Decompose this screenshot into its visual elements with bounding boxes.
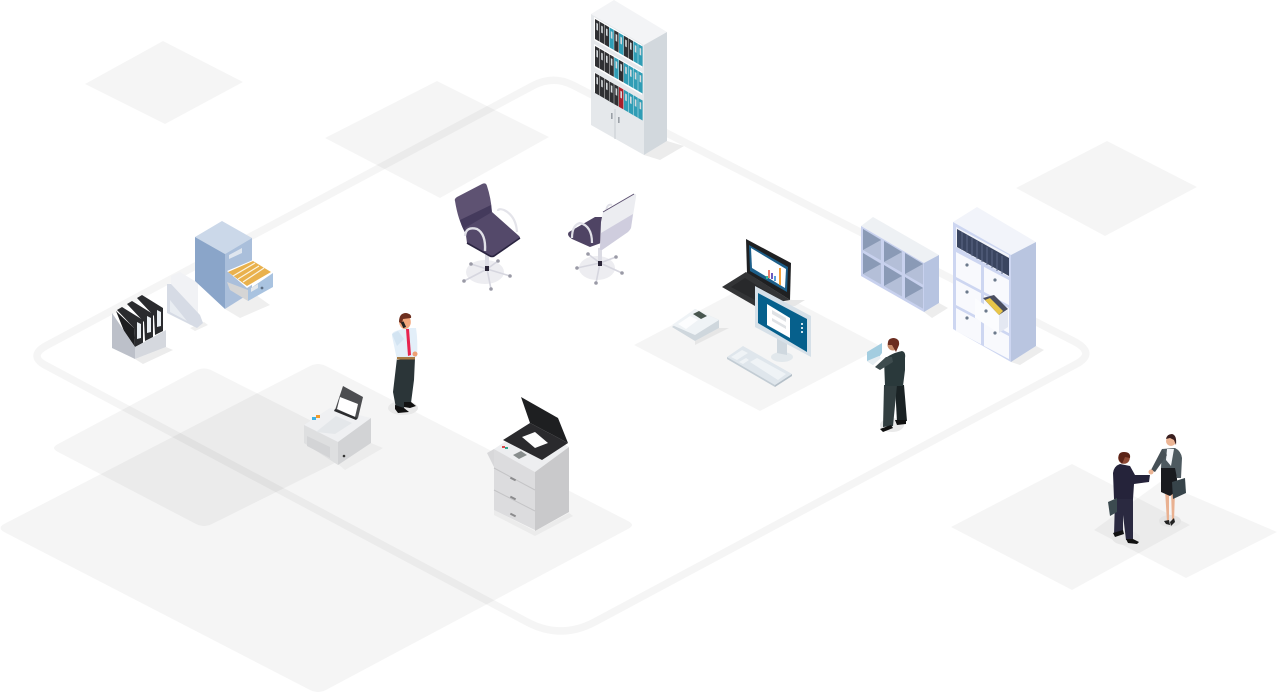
businessman [1108, 452, 1154, 544]
open file drawer [975, 295, 1008, 333]
man on phone [388, 313, 418, 415]
binders row 3 [595, 73, 643, 120]
binders row 2 [595, 46, 643, 93]
open cube shelf [861, 217, 948, 318]
tall storage cabinet [953, 207, 1044, 365]
desktop printer [304, 386, 383, 470]
chair right [568, 194, 636, 285]
bookcase [591, 0, 684, 160]
business people shaking hands [1108, 434, 1186, 545]
businesswoman [1151, 434, 1186, 526]
magazine holder [167, 272, 208, 331]
filing cabinet [195, 221, 273, 318]
desk: keyboard [727, 346, 792, 387]
chair left [455, 183, 520, 291]
bar chart [766, 268, 781, 285]
desk: telephone [672, 309, 729, 345]
multifunction copier [487, 397, 573, 536]
open drawer [227, 260, 273, 301]
desk: desktop monitor [755, 286, 811, 362]
desk: laptop [722, 239, 805, 306]
man with tablet [867, 338, 907, 432]
binder holder with black binders [112, 295, 173, 364]
binders row 1 [595, 19, 643, 66]
tablet [867, 343, 882, 365]
track path [37, 80, 1086, 631]
